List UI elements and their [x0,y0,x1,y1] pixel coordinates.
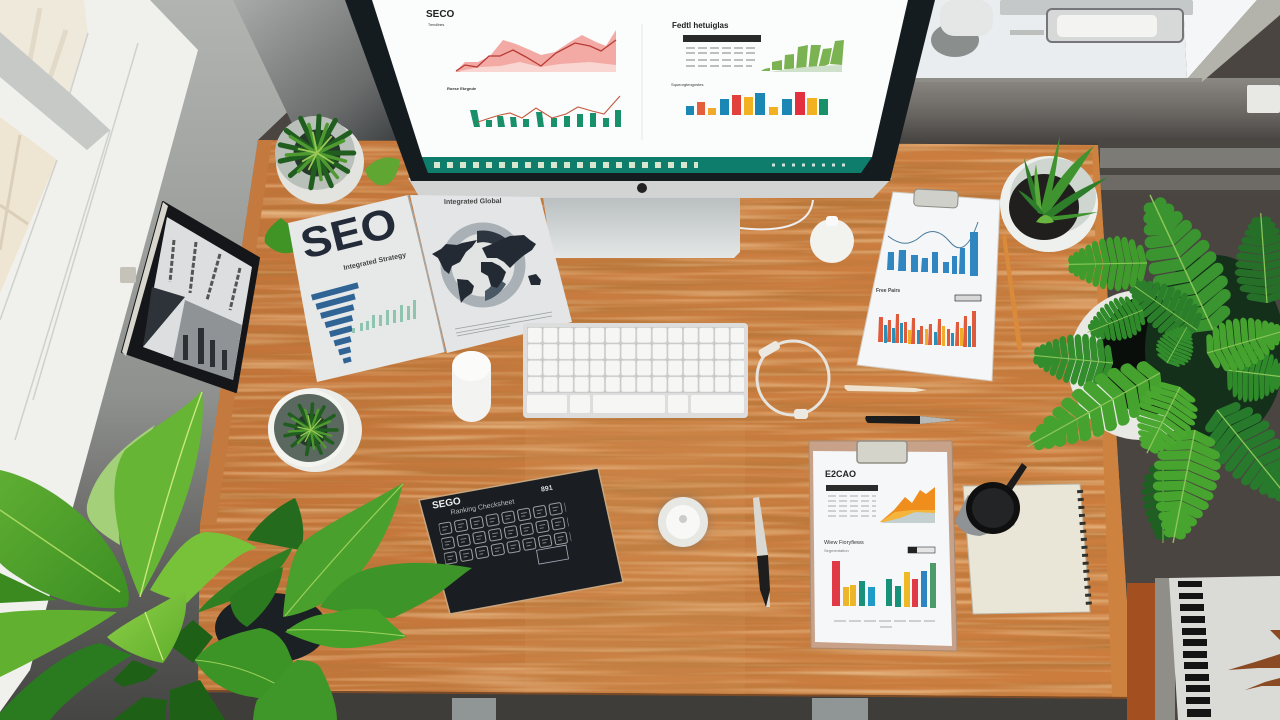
dashboard heading right: Fedtl hetuiglas [672,21,729,30]
monitor screen [372,0,908,157]
colour bars [878,311,976,347]
long right leaf [320,563,472,618]
toggle [908,547,935,553]
tablet number: 891 [541,485,553,494]
tablet photo [173,300,242,380]
table rows [686,48,755,66]
pen: cream [844,385,927,392]
pale lower leaf [107,590,186,663]
tablet screen [143,217,252,380]
toggle [955,295,981,301]
desk legs [452,698,868,720]
silver tablet edge [122,202,168,356]
upright leaf rear lobe [87,425,155,545]
monitor bezel [345,0,935,181]
ceramic pot under fern [1068,255,1280,445]
tablet [120,202,259,392]
tablet clip [120,267,136,283]
bottom-right chart sheet [1127,576,1280,720]
chart label: Roese Ekrgnde [447,86,477,91]
fern plant [1015,182,1280,548]
big-leaf plant [0,390,472,720]
grass blades [1018,136,1108,224]
tablet dark panel [143,287,185,347]
tablet title: SEGO [431,496,462,512]
orange area chart [880,487,935,523]
black cup [955,463,1027,536]
monitor chin [408,178,892,198]
left lower leaf [0,573,57,603]
desk [190,130,1140,700]
green bars and line chart [470,96,621,127]
red area chart [456,30,616,72]
bottom right leaf [253,660,337,720]
dark drooping leaf [230,567,283,627]
wall light fitting [1247,85,1280,113]
upper window pane [0,0,88,93]
white cap [810,216,854,263]
tablet caption: Ranking Checksheet [450,499,515,517]
pencil [1002,235,1022,353]
table header [826,485,878,491]
pale leaf [150,532,257,603]
monitor [345,0,935,258]
lower clipboard report [809,441,957,651]
colour bar chart [832,561,936,608]
plant: left pot [268,388,362,472]
cup body [955,495,1015,536]
white cable ring [757,340,829,419]
loose green leaf by magazine [265,218,297,253]
wall trim [1098,140,1280,194]
photo silhouettes [183,328,227,370]
chart label: Free Pairs [876,288,900,294]
monitor stand [543,197,740,258]
lower window pane [0,117,57,293]
globe ring [432,228,541,303]
key grid [438,501,572,567]
top-right shelf [910,0,1280,82]
tablet button [537,545,569,564]
stand cable [740,200,813,229]
right page text lines [455,312,552,336]
plant: top-right pot [1000,136,1108,252]
chart label: Squeorgtengostes [671,82,703,87]
magazine title SEO: SEO [296,199,402,268]
left wide leaf [0,610,117,677]
dark long leaf [197,547,293,613]
plant pot [215,593,327,663]
keyboard [523,323,748,418]
black keyboard tablet [419,468,623,614]
dashboard heading SECO: SECO [426,9,455,20]
upright leaf [114,390,203,597]
open SEO magazine [288,195,572,382]
footer lines [834,621,935,627]
left page [288,195,445,382]
loose leaf [365,158,400,185]
dark rear leaf [247,498,303,550]
cup handle [1006,463,1027,490]
world map [432,235,541,303]
bottom key row [527,395,567,413]
big lit leaf [0,470,129,608]
line chart [888,222,978,248]
spiral binding [1080,490,1089,606]
heading: E2CAO [825,469,856,479]
silver device [1000,0,1193,15]
bottom big leaf [195,628,300,701]
apple-style logo [637,183,647,193]
taskbar [422,157,872,173]
standing pen [753,497,770,607]
metal keyboard rack [1047,9,1183,42]
lower-left dark leaf [0,643,132,720]
window sash [0,32,110,150]
dried twigs [1228,630,1280,690]
metal clip [914,189,958,208]
metal clip [857,441,907,463]
desk edge strips [200,140,272,525]
black key bars [1178,581,1211,717]
magazine subtitle: Integrated Strategy [343,252,407,272]
pen: black [865,416,958,424]
window frame [0,0,198,712]
table rows [828,496,876,516]
section caption: Segmentation [824,548,849,553]
tablet text lines [170,240,240,310]
blue horizontal bars [311,282,377,367]
frame shading lines [0,33,138,440]
glass bottle [931,0,993,57]
upper clipboard report [857,189,1000,381]
section heading: Wiew Fioryfiews [824,540,864,546]
back dark leaves [113,620,225,720]
stick [1010,30,1044,35]
plant: top-left pot [275,116,400,204]
green bar chart [761,40,844,72]
right page [410,195,572,353]
white dome [658,497,708,547]
right page heading: Integrated Global [444,198,502,206]
multicolour bar chart [686,92,828,115]
large centre leaf [283,483,403,617]
blue bars [887,232,978,276]
teal small bars [352,300,416,333]
mouse [452,351,491,422]
chart label: Trendlines [428,23,444,27]
table header bar [683,35,761,42]
spiral notebook [963,484,1090,614]
cup rim [966,482,1020,534]
right lower leaf [285,609,407,648]
